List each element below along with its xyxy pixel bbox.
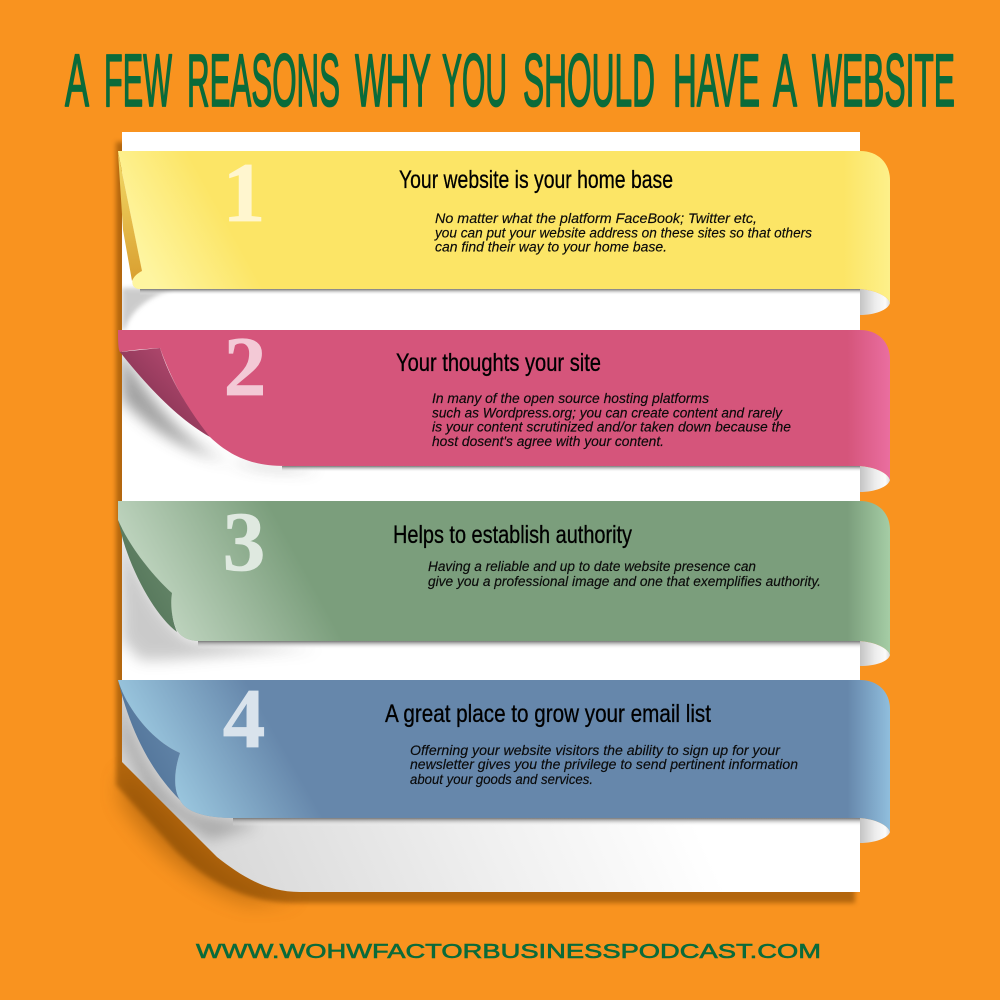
text block 4: Offerning your website visitors the ability to sign up for your xyxy=(410,743,781,758)
title: REASONS xyxy=(187,39,340,122)
right curl underside 4 xyxy=(860,818,890,843)
text block 2: host dosent's agree with your content. xyxy=(432,434,664,449)
heading 2: Your thoughts your site xyxy=(396,349,601,377)
title: WHY xyxy=(355,39,431,122)
text block 3 xyxy=(428,559,821,589)
panel: reason 3 xyxy=(118,495,890,666)
paper sheet xyxy=(116,132,860,903)
footer url: WWW.WOHWFACTORBUSINESSPODCAST.COM xyxy=(196,940,821,963)
text block 4 xyxy=(410,743,798,787)
text block 3: Having a reliable and up to date website presence can xyxy=(428,559,756,574)
title xyxy=(65,39,955,122)
title: FEW xyxy=(104,39,172,122)
text block 2: In many of the open source hosting platforms xyxy=(432,391,709,406)
title: A xyxy=(65,39,89,122)
heading 1: Your website is your home base xyxy=(399,166,673,194)
text block 2 xyxy=(432,391,791,449)
number 1: 1 xyxy=(223,146,265,240)
ribbon 3 xyxy=(118,501,890,655)
number 3: 3 xyxy=(223,495,265,589)
ribbon shadows on paper xyxy=(118,288,860,840)
text block 4: newsletter gives you the privilege to send pertinent information xyxy=(410,757,798,772)
text block 3: give you a professional image and one that exemplifies authority. xyxy=(428,574,821,589)
text block 1: can find their way to your home base. xyxy=(435,240,667,254)
number 2: 2 xyxy=(224,320,266,414)
right curl underside 3 xyxy=(860,641,890,666)
ribbon 3 highlight xyxy=(118,501,860,641)
heading 3: Helps to establish authority xyxy=(393,521,632,549)
panel: reason 4 xyxy=(118,672,890,843)
text block 1 xyxy=(434,211,812,254)
fold 3 xyxy=(118,520,177,632)
title: HAVE xyxy=(673,39,760,122)
ribbon 4 xyxy=(118,680,890,832)
fold 1 xyxy=(118,152,142,281)
ribbon 4 highlight xyxy=(118,680,860,818)
text block 2: is your content scrutinized and/or taken down because the xyxy=(432,420,791,434)
right curl underside 2 xyxy=(860,466,890,492)
panel: reason 1 xyxy=(118,146,890,315)
fold 2 xyxy=(120,348,210,437)
heading 4: A great place to grow your email list xyxy=(385,700,711,728)
fold 4 xyxy=(118,680,180,800)
text block 1: No matter what the platform FaceBook; Twitter etc, xyxy=(435,211,757,226)
title: YOU xyxy=(442,39,507,122)
text block 2: such as Wordpress.org; you can create content and rarely xyxy=(432,406,783,420)
text block 4: about your goods and services. xyxy=(410,772,593,787)
ribbon 2 xyxy=(118,330,890,480)
ribbon 1 highlight xyxy=(118,151,860,289)
title: SHOULD xyxy=(523,39,655,122)
panel: reason 2 xyxy=(118,320,890,492)
title: A xyxy=(773,39,797,122)
text block 1: you can put your website address on these sites so that others xyxy=(434,226,812,240)
ribbon 1 xyxy=(118,151,890,303)
number 4: 4 xyxy=(223,672,265,766)
right curl underside 1 xyxy=(860,289,890,315)
